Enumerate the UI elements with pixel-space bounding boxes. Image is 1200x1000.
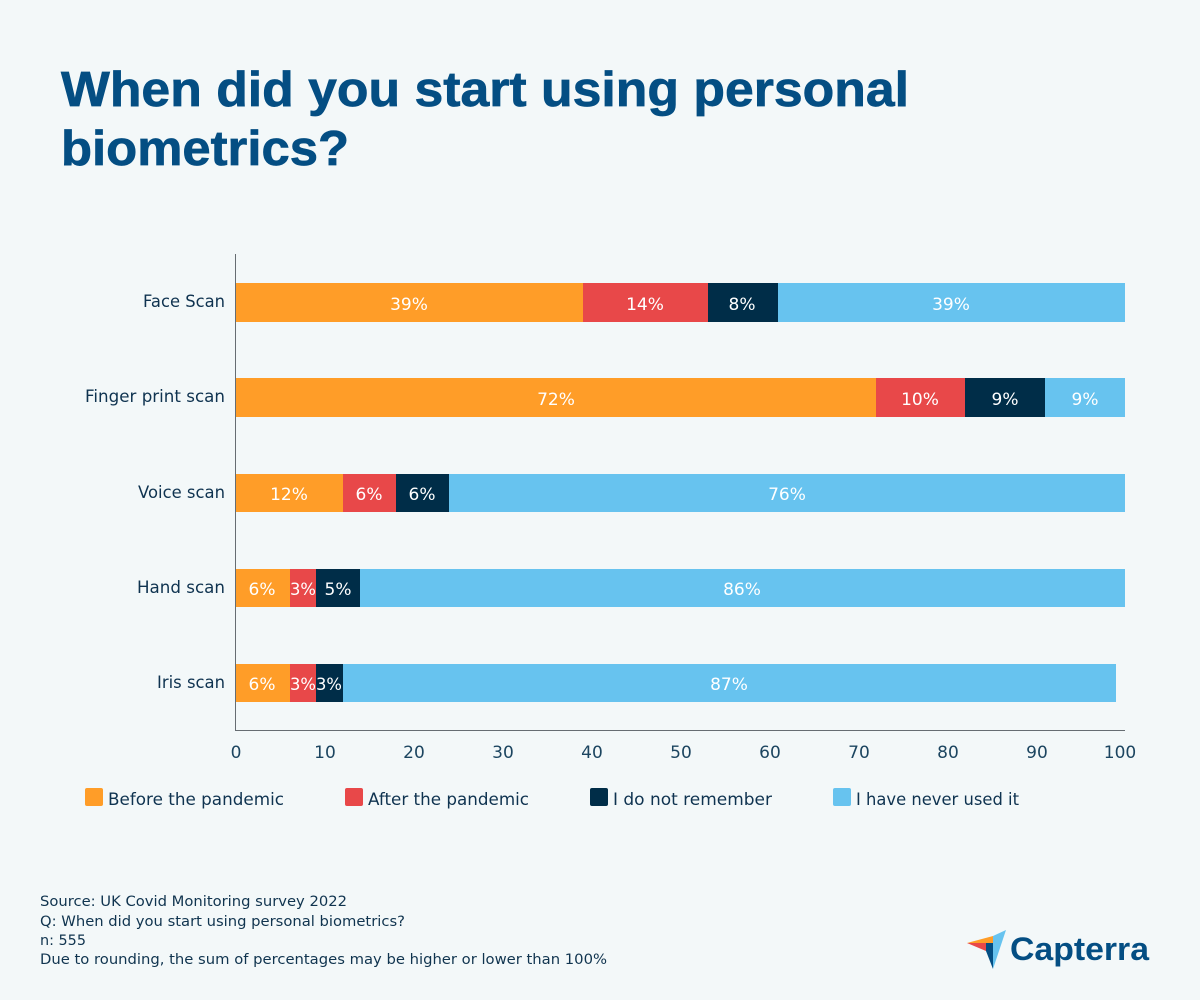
x axis labels: 0: [231, 743, 241, 763]
source notes: [40, 894, 607, 968]
bar: Finger print scan: 10%: [901, 390, 939, 410]
bar: Finger print scan: 9%: [992, 390, 1018, 410]
bar: Voice scan: 6%: [356, 485, 382, 505]
bar: Voice scan: 6%: [409, 485, 435, 505]
legend: I do not remember: [613, 790, 772, 809]
bar: Hand scan: 86%: [723, 580, 761, 600]
bar: Finger print scan: [85, 378, 1125, 417]
legend: Before the pandemic: [108, 790, 284, 809]
title: [61, 63, 909, 176]
bar: Face Scan: 39%: [390, 295, 428, 315]
bar: Iris scan: 3%: [316, 675, 342, 695]
chart axes: [236, 254, 1125, 730]
bar: Voice scan: 76%: [768, 485, 806, 505]
bar: Face Scan: [143, 283, 1125, 322]
bar: Iris scan: 6%: [249, 675, 275, 695]
bar: Finger print scan: 72%: [537, 390, 575, 410]
bar: Hand scan: 3%: [290, 580, 316, 600]
bar: Iris scan: [157, 664, 1116, 702]
bar: Voice scan: Voice scan: [138, 483, 225, 502]
x axis labels: 80: [937, 743, 959, 763]
x axis labels: 30: [492, 743, 514, 763]
bar: Finger print scan: 9%: [1072, 390, 1098, 410]
bar: Face Scan: 14%: [626, 295, 664, 315]
x axis labels: 10: [314, 743, 336, 763]
bar: Voice scan: 12%: [270, 485, 308, 505]
bar: Finger print scan: Finger print scan: [85, 387, 225, 406]
bar: Hand scan: Hand scan: [137, 578, 225, 597]
bar: Hand scan: [137, 569, 1125, 607]
source notes: Q: When did you start using personal biometrics?: [40, 914, 405, 930]
x axis labels: 60: [759, 743, 781, 763]
x axis labels: 100: [1104, 743, 1136, 763]
bar: Face Scan: 8%: [729, 295, 755, 315]
legend: After the pandemic: [368, 790, 529, 809]
bar: Voice scan: [138, 474, 1125, 512]
bar: Iris scan: 87%: [710, 675, 748, 695]
x axis labels: 20: [403, 743, 425, 763]
x axis labels: 50: [670, 743, 692, 763]
x axis labels: [231, 743, 1136, 763]
source notes: Source: UK Covid Monitoring survey 2022: [40, 894, 347, 910]
x axis labels: 70: [848, 743, 870, 763]
source notes: Due to rounding, the sum of percentages may be higher or lower than 100%: [40, 952, 607, 968]
logo: Capterra: Capterra: [1010, 931, 1149, 967]
bar: Iris scan: 3%: [290, 675, 316, 695]
logo: Capterra: [967, 930, 1149, 969]
source notes: n: 555: [40, 933, 86, 949]
legend: I have never used it: [856, 790, 1020, 809]
bar: Face Scan: Face Scan: [143, 292, 225, 311]
bar: Hand scan: 6%: [249, 580, 275, 600]
bar: Face Scan: 39%: [932, 295, 970, 315]
x axis labels: 90: [1026, 743, 1048, 763]
x axis labels: 40: [581, 743, 603, 763]
legend: [85, 788, 1020, 809]
bar: Iris scan: Iris scan: [157, 673, 225, 692]
title: When did you start using personal: [61, 63, 909, 117]
bar: Hand scan: 5%: [325, 580, 351, 600]
title: biometrics?: [61, 122, 349, 176]
